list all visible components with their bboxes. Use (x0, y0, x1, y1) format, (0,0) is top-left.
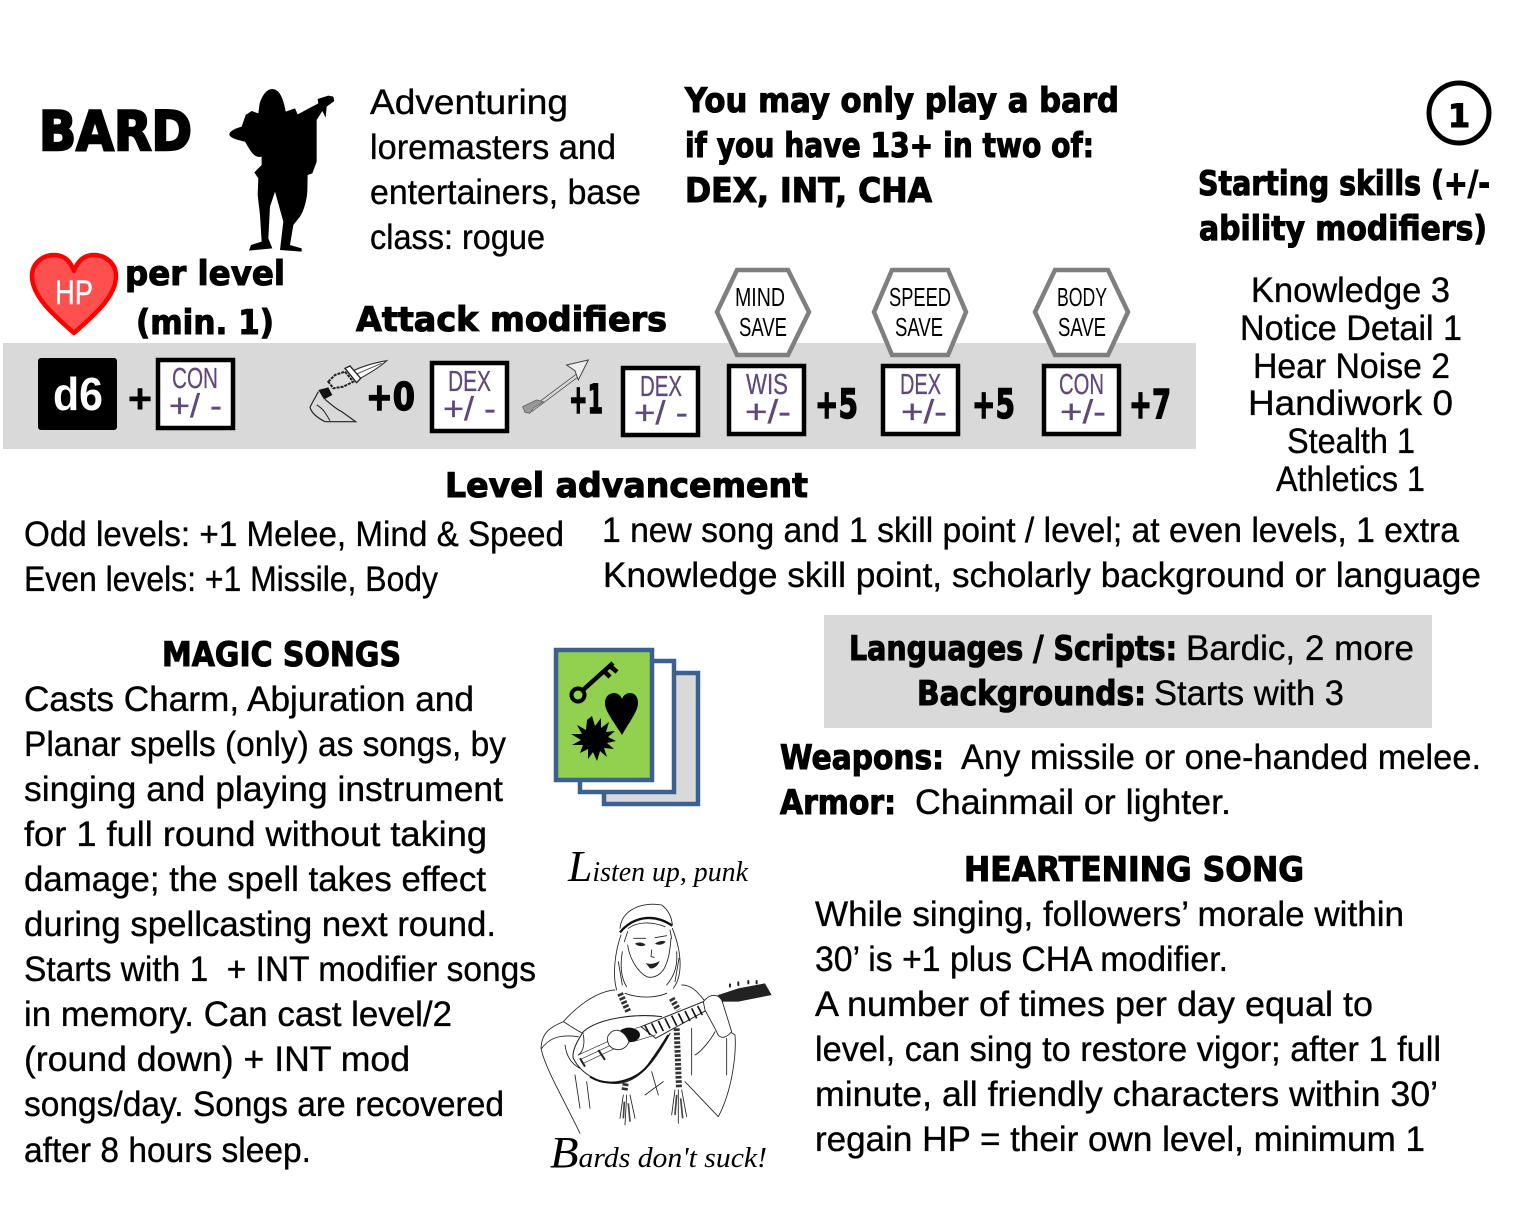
body save: SAVE (1058, 312, 1106, 342)
hair and headband (620, 904, 672, 928)
DEX modifier box missile (623, 368, 698, 435)
icon: HP heart (32, 255, 116, 333)
arrow bonus: +1 (569, 377, 603, 423)
heartening song text: minute, all friendly characters within 30’ (815, 1075, 1438, 1114)
DEX modifier box missile: +/ - (634, 394, 688, 431)
body save: CON (1059, 369, 1104, 401)
mind save: +/- (745, 393, 791, 430)
mandolin (573, 1016, 670, 1083)
magic songs text: Casts Charm, Abjuration and (24, 680, 474, 719)
DEX modifier box missile: DEX (640, 371, 682, 403)
heartening song text: 30’ is +1 plus CHA modifier. (815, 940, 1228, 979)
panel: languages and backgrounds: Backgrounds: (917, 674, 1146, 714)
body and sleeves (541, 985, 735, 1133)
face (628, 936, 671, 977)
heartening song text: While singing, followers’ morale within (815, 895, 1404, 934)
heartening song text: A number of times per day equal to (815, 985, 1373, 1024)
caption: bards dont suck: Bards don't suck! (550, 1128, 767, 1177)
icon: dagger (310, 361, 387, 422)
magic songs text: in memory. Can cast level/2 (24, 995, 452, 1034)
CON modifier box: CON (172, 363, 218, 395)
skills list: Knowledge 3 (1251, 271, 1450, 310)
level skills advancement: Knowledge skill point, scholarly background or language (603, 556, 1481, 595)
caption: listen up: Listen up, punk (567, 842, 749, 891)
level skills advancement (602, 511, 1481, 595)
weapons and armor: Any missile or one-handed melee. (961, 738, 1481, 777)
speed save: +5 (972, 382, 1015, 428)
speed save: DEX (900, 369, 941, 401)
magic songs text: (round down) + INT mod (24, 1040, 410, 1079)
weapons and armor (780, 738, 1481, 823)
magic songs text: after 8 hours sleep. (24, 1131, 311, 1170)
icon: arrow (523, 360, 588, 413)
CON modifier box (158, 360, 233, 428)
panel: languages and backgrounds: Languages / Scripts: (849, 629, 1177, 669)
skills list: Notice Detail 1 (1240, 309, 1462, 348)
panel: languages and backgrounds: Starts with 3 (1154, 674, 1344, 713)
hit die: d6 (53, 368, 103, 420)
panel: languages and backgrounds: Bardic, 2 more (1186, 629, 1414, 668)
mind save: WIS (746, 369, 788, 401)
magic songs text: singing and playing instrument (24, 770, 503, 809)
braids (620, 993, 679, 1092)
DEX modifier box melee: DEX (448, 366, 491, 398)
per level label: (min. 1) (136, 303, 274, 343)
skills list: Stealth 1 (1287, 422, 1415, 461)
level badge: 1 (1448, 97, 1470, 135)
heartening song heading: HEARTENING SONG (964, 850, 1304, 890)
speed save (874, 270, 1015, 434)
DEX modifier box melee (432, 363, 507, 431)
mind save: MIND (735, 282, 785, 312)
starting skills heading: ability modifiers) (1199, 209, 1487, 249)
per level label: per level (125, 254, 285, 294)
skills list: Hear Noise 2 (1253, 347, 1450, 386)
attack modifiers heading: Attack modifiers (356, 300, 667, 340)
mind save: +5 (815, 382, 858, 428)
illustration: woman with mandolin (541, 904, 772, 1133)
requirement text: if you have 13+ in two of: (685, 126, 1094, 166)
weapons and armor: Armor: (780, 783, 896, 823)
magic songs text (24, 680, 536, 1170)
class description (370, 83, 641, 257)
hands (607, 995, 732, 1050)
skills list (1240, 271, 1462, 499)
DEX modifier box melee: +/ - (443, 390, 496, 427)
plus sign: + (127, 379, 153, 417)
body save: BODY (1057, 282, 1107, 312)
magic songs text: damage; the spell takes effect (24, 860, 486, 899)
skills list: Athletics 1 (1276, 460, 1425, 499)
magic songs text: Starts with 1 + INT modifier songs (24, 950, 536, 989)
level saves advancement (24, 515, 564, 599)
weapons and armor: Weapons: (780, 738, 944, 778)
class description: class: rogue (370, 218, 545, 257)
magic songs text: for 1 full round without taking (24, 815, 487, 854)
speed save: SAVE (895, 312, 943, 342)
magic songs heading: MAGIC SONGS (162, 635, 401, 675)
speed save: SPEED (889, 282, 951, 312)
panel: languages and backgrounds (824, 615, 1432, 728)
level skills advancement: 1 new song and 1 skill point / level; at even levels, 1 extra (602, 511, 1460, 550)
requirement text (684, 81, 1119, 211)
level advancement heading: Level advancement (445, 466, 808, 506)
icon: spell cards (556, 650, 698, 804)
body save: +/- (1060, 393, 1106, 430)
dagger bonus: +0 (366, 375, 415, 419)
heartening song text: level, can sing to restore vigor; after 1 full (815, 1030, 1441, 1069)
requirement text: DEX, INT, CHA (685, 171, 933, 211)
title: BARD (39, 100, 192, 163)
mind save: SAVE (739, 312, 787, 342)
level saves advancement: Even levels: +1 Missile, Body (24, 560, 438, 599)
magic songs text: during spellcasting next round. (24, 905, 496, 944)
magic songs text: songs/day. Songs are recovered (24, 1085, 504, 1124)
heartening song text (815, 895, 1441, 1159)
icon: HP heart: HP (55, 274, 93, 312)
CON modifier box: +/ - (169, 387, 222, 424)
heartening song text: regain HP = their own level, minimum 1 (815, 1120, 1425, 1159)
gray stats band (3, 343, 1196, 449)
class description: loremasters and (370, 128, 616, 167)
magic songs text: Planar spells (only) as songs, by (24, 725, 506, 764)
skills list: Handiwork 0 (1248, 384, 1453, 423)
level badge (1429, 83, 1489, 143)
level saves advancement: Odd levels: +1 Melee, Mind & Speed (24, 515, 564, 554)
body save (1035, 270, 1171, 434)
body save: +7 (1129, 382, 1171, 428)
class description: Adventuring (370, 83, 568, 122)
speed save: +/- (901, 393, 947, 430)
icon: bard silhouette (229, 89, 334, 252)
starting skills heading (1198, 164, 1490, 249)
mind save (717, 270, 858, 434)
hit die (38, 358, 117, 430)
class description: entertainers, base (370, 173, 641, 212)
per level label (125, 254, 285, 343)
weapons and armor: Chainmail or lighter. (915, 783, 1231, 822)
requirement text: You may only play a bard (684, 81, 1119, 121)
